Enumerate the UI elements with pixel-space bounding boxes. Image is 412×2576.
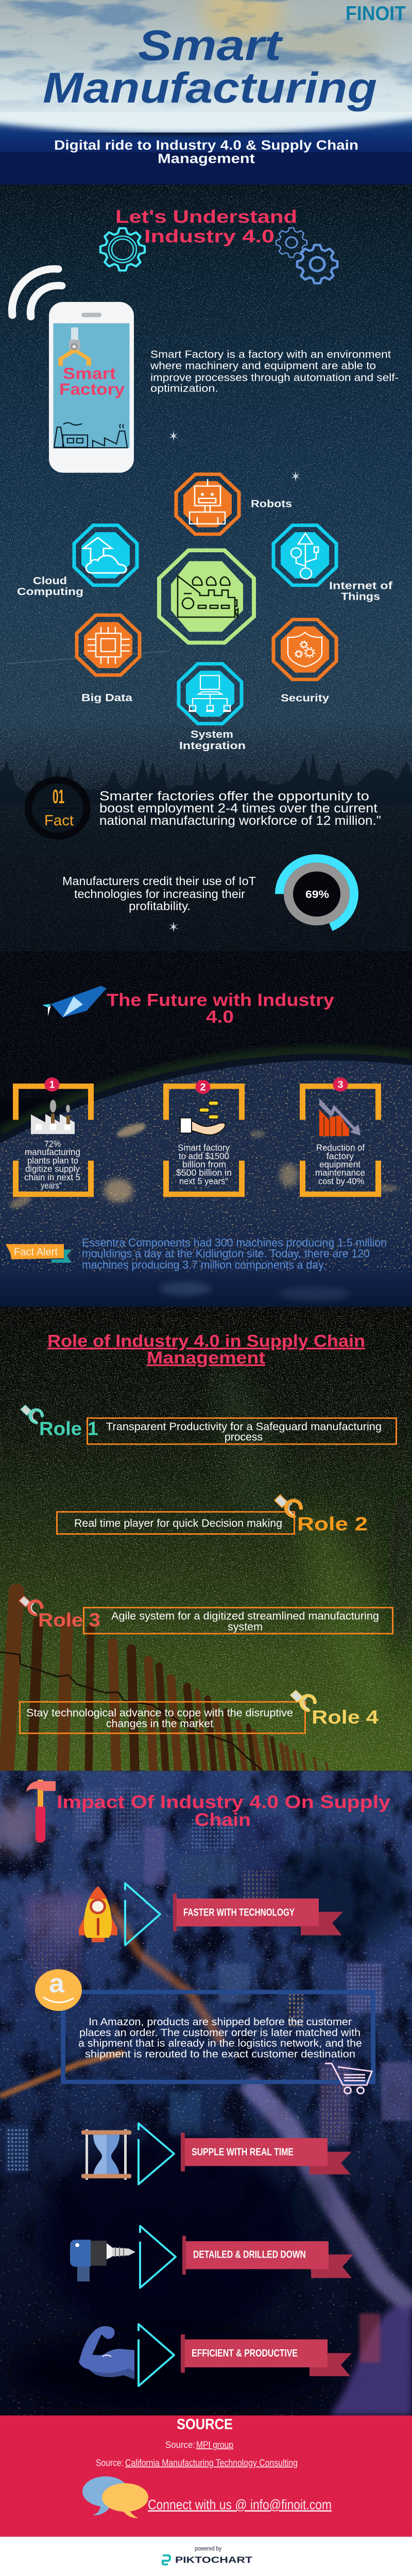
role 3: Agile system for a digitized streamlined manufacturing: [111, 1610, 379, 1622]
phone screen text: [59, 364, 125, 398]
arrow 4: [139, 2324, 174, 2386]
stat text 1: 72%: [44, 1139, 61, 1149]
node: cloud computing: [74, 526, 137, 585]
text: source lines: Source:: [165, 2439, 195, 2450]
text: Essentra fact: [82, 1236, 387, 1271]
heading: Let's Understand Industry 4.0: Industry 4.0: [144, 226, 274, 247]
heading: role of industry 4.0: Management: [147, 1348, 265, 1367]
heading: the future with industry 4.0: [107, 990, 334, 1027]
heading: the future with industry 4.0: 4.0: [206, 1007, 234, 1027]
text: connect with us: Connect with us @ info@finoit.com: [148, 2497, 332, 2512]
heading: Let's Understand Industry 4.0: [115, 206, 297, 247]
stat text 3: equipment: [319, 1159, 360, 1170]
text: source lines: Source:: [96, 2458, 124, 2468]
icon: hammer: [26, 1780, 56, 1843]
icon: drill: [70, 2240, 135, 2281]
label: system integration: [179, 729, 246, 752]
text: amazon shipping: places an order. The customer order is later matched with: [79, 2027, 360, 2039]
node: security: [273, 620, 336, 680]
heading: source: SOURCE: [177, 2416, 233, 2433]
text: fact statement: [99, 789, 381, 828]
title: [43, 21, 377, 112]
stat text 3: cost by 40%: [318, 1176, 364, 1186]
role 2: [57, 1495, 368, 1535]
text: manufacturers credit IoT: profitability.: [129, 900, 191, 913]
icon: flexed muscle: [79, 2326, 134, 2379]
section background: earth from orbit: [0, 0, 412, 184]
icon: factory: [31, 1100, 75, 1134]
banner: faster with technology: FASTER WITH TECHNOLOGY: [183, 1907, 295, 1918]
text: amazon shipping: In Amazon, products are shipped before the customer: [89, 2016, 352, 2028]
page-bottom white strip: [0, 2537, 412, 2576]
stat text 2: billion from: [182, 1159, 226, 1170]
arrow 3: [140, 2226, 176, 2288]
text: manufacturers credit IoT: Manufacturers credit their use of IoT: [62, 875, 256, 888]
phone illustration: [49, 302, 134, 473]
central factory octagon: [159, 550, 254, 642]
heading: Let's Understand Industry 4.0: Let's Understand: [115, 206, 297, 227]
stat text 1: years": [41, 1180, 62, 1191]
stat card 3: 3: [337, 1079, 344, 1091]
banner: efficient and productive: [181, 2334, 352, 2376]
text: smart factory definition: [150, 349, 399, 394]
icon: rocket: [79, 1886, 117, 1942]
stat card 1: 1: [49, 1079, 55, 1091]
heading: impact of industry 4.0: [57, 1791, 390, 1830]
badge: 01 fact: Fact: [44, 812, 74, 829]
banner: efficient and productive: EFFICIENT & PRODUCTIVE: [192, 2347, 298, 2359]
text: Essentra fact: Essentra Components had 300 machines producing 1.5 million: [82, 1236, 387, 1249]
footer background band: [0, 2415, 412, 2537]
stat text 1: chain in next 5: [24, 1172, 80, 1182]
stat card 2: [166, 1080, 242, 1194]
label: big data: Big Data: [81, 692, 133, 704]
stat card 1: [15, 1077, 91, 1194]
stat card 2: 2: [200, 1082, 206, 1093]
text: amazon shipping: shipment is rerouted to the exact customer destination: [85, 2048, 355, 2060]
label: cloud computing: Computing: [17, 586, 83, 598]
icon: cyan gear: [100, 228, 145, 270]
icon: speech bubbles: [82, 2477, 148, 2518]
banner: faster with technology: [173, 1893, 343, 1935]
subtitle: [54, 138, 358, 166]
role 1: process: [225, 1431, 263, 1443]
label: internet of things: [329, 580, 392, 602]
heading: role of industry 4.0: [47, 1332, 365, 1367]
badge: 01 fact: 01: [53, 786, 64, 808]
text: smart factory definition: optimization.: [150, 383, 218, 394]
icon: falling cost chart: [319, 1098, 360, 1136]
stat text 1: [24, 1139, 80, 1191]
panel: amazon example: [35, 1969, 373, 2094]
role 1: Transparent Productivity for a Safeguard manufacturing: [106, 1420, 382, 1433]
label: system integration: Integration: [179, 740, 246, 752]
text: fact statement: national manufacturing workforce of 12 million.": [99, 814, 381, 828]
icon: blue gears: [276, 228, 337, 283]
label: cloud computing: [17, 575, 83, 598]
role 4: Stay technological advance to cope with the disruptive: [26, 1707, 293, 1719]
label: cloud computing: Cloud: [33, 575, 67, 587]
node: robots: [176, 474, 239, 534]
banner: detailed and drilled down: DETAILED & DRILLED DOWN: [193, 2249, 306, 2260]
text: smart factory definition: improve processes through automation and self-: [150, 372, 399, 383]
node: system integration: [179, 664, 242, 724]
role 4: Role 4: [312, 1707, 379, 1728]
factory line icon: [54, 422, 128, 448]
banner: supple with real time: SUPPLE WITH REAL TIME: [192, 2146, 294, 2158]
text: source lines: MPI group: [196, 2439, 233, 2450]
title: Smart: [138, 21, 283, 70]
stat card 3: [303, 1077, 378, 1194]
role 1: [21, 1405, 397, 1444]
text: manufacturers credit IoT: [62, 875, 256, 913]
ribbon: fact alert: [6, 1244, 72, 1263]
text: manufacturers credit IoT: technologies for increasing their: [74, 887, 245, 901]
label: internet of things: Things: [341, 591, 380, 602]
stat text 3: [315, 1143, 365, 1186]
role 3: Role 3: [38, 1610, 100, 1631]
stat text 2: [176, 1143, 232, 1186]
arrow 1: [125, 1883, 160, 1945]
node: big data: [77, 615, 140, 675]
logo: piktochart: PIKTOCHART: [175, 2555, 252, 2565]
role 3: [19, 1596, 392, 1634]
phone screen text: Smart: [63, 364, 116, 382]
role 4: changes in the market: [106, 1718, 213, 1730]
stat text 2: $500 billion in: [176, 1168, 232, 1178]
text: powered by: powered by: [195, 2545, 222, 2552]
text: Essentra fact: machines producing 3.7 million components a day.: [82, 1259, 326, 1271]
text: fact statement: Smarter factories offer the opportunity to: [99, 789, 369, 803]
donut chart: 69%: 69%: [305, 888, 329, 901]
node: internet of things: [273, 526, 336, 585]
text: source lines: [96, 2439, 298, 2468]
arrow 2: [139, 2123, 174, 2184]
icon: hand with coins: [180, 1101, 225, 1135]
icon: amazon badge: a: [49, 1969, 65, 1998]
heading: the future with industry 4.0: The Future with Industry: [107, 990, 334, 1010]
role 4: [20, 1690, 379, 1733]
label: robots: Robots: [251, 498, 292, 510]
stat text 2: next 5 years": [179, 1176, 228, 1186]
stat text 3: factory: [327, 1151, 354, 1161]
text: smart factory definition: where machinery and equipment are able to: [150, 360, 376, 371]
stat text 2: Smart factory: [178, 1143, 230, 1153]
section background: green night sky with fence: [0, 1307, 412, 1772]
banner: supple with real time: [181, 2133, 352, 2175]
label: system integration: System: [191, 729, 233, 740]
stat text 2: to add $1500: [179, 1151, 229, 1161]
badge: 01 fact: [28, 780, 87, 836]
logo: piktochart: [163, 2555, 252, 2565]
heading: impact of industry 4.0: Impact Of Industry 4.0 On Supply: [57, 1791, 390, 1812]
label: security: Security: [281, 692, 330, 704]
icon: shopping cart: [325, 2063, 372, 2094]
stat text 1: plants plan to: [27, 1156, 78, 1165]
role 1: Role 1: [39, 1418, 98, 1439]
text: amazon shipping: a shipment that is already in the logistics network, and the: [78, 2038, 362, 2049]
stat text 1: manufacturing: [25, 1147, 80, 1157]
text: source lines: California Manufacturing Technology Consulting: [125, 2458, 298, 2468]
subtitle: Management: [158, 151, 255, 166]
heading: impact of industry 4.0: Chain: [195, 1809, 251, 1830]
icon: origami plane: [42, 986, 107, 1017]
section background: night city: [0, 1771, 412, 2415]
icon: hourglass: [81, 2129, 131, 2180]
label: internet of things: Internet of: [329, 580, 392, 591]
donut chart: 69%: [279, 858, 354, 927]
text: amazon shipping: [78, 2016, 362, 2060]
stat text 1: digitize supply: [25, 1164, 80, 1174]
text: smart factory definition: Smart Factory is a factory with an environment: [150, 349, 391, 361]
subtitle: Digital ride to Industry 4.0 & Supply Chain: [54, 138, 358, 152]
heading: role of industry 4.0: Role of Industry 4.0 in Supply Chain: [47, 1332, 365, 1351]
title: Manufacturing: [43, 64, 377, 112]
role 2: Real time player for quick Decision making: [74, 1517, 282, 1529]
banner: detailed and drilled down: [182, 2236, 353, 2278]
ribbon: fact alert: Fact Alert: [14, 1246, 58, 1258]
role 2: Role 2: [297, 1514, 368, 1535]
stat text 3: maintenance: [315, 1168, 365, 1178]
text: Essentra fact: mouldings a day at the Kidlington site. Today, there are 120: [82, 1247, 370, 1260]
section background: starry night sky with forest: [0, 184, 412, 976]
section background: earth at night: [0, 951, 412, 1307]
robot claw: [58, 328, 91, 366]
phone screen text: Factory: [59, 380, 125, 398]
icon: wifi arcs: [12, 269, 62, 317]
text: fact statement: boost employment 2-4 times over the current: [99, 802, 377, 816]
role 3: system: [228, 1621, 263, 1633]
icon: amazon badge: [35, 1969, 82, 2011]
stat text 3: Reduction of: [316, 1143, 365, 1153]
